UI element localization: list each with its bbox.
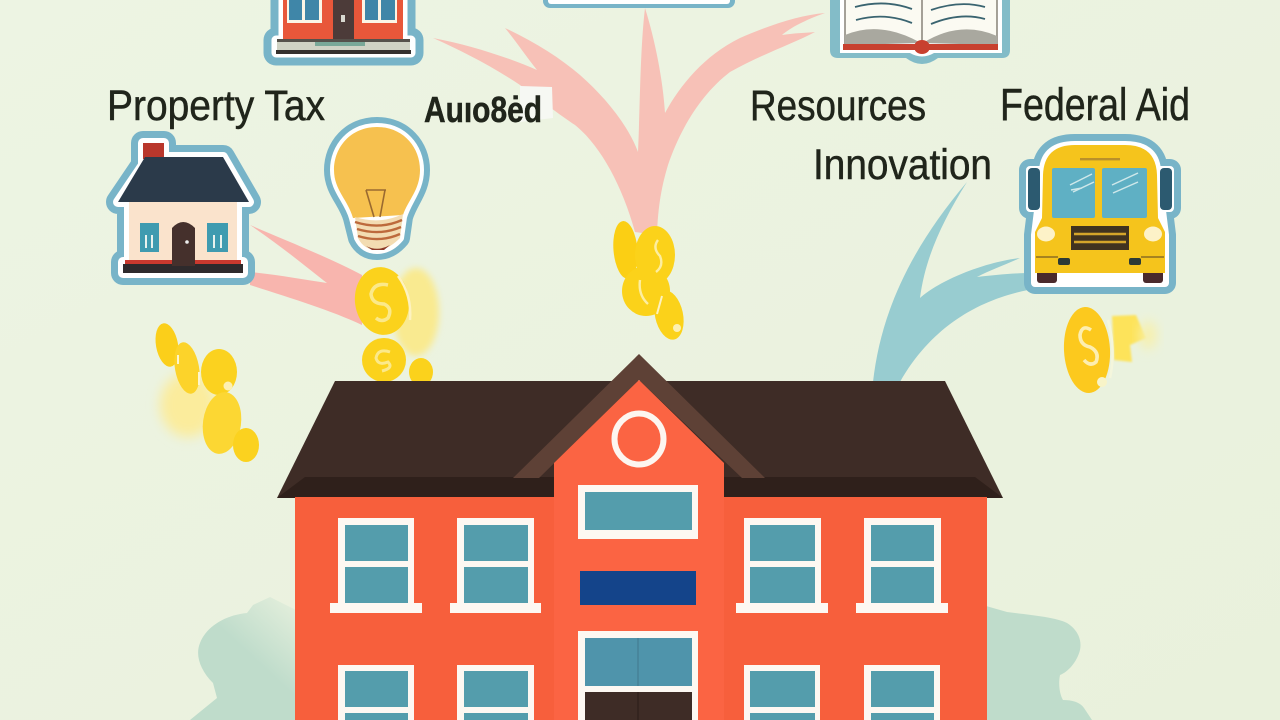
icon: open book [830, 0, 1010, 64]
coins: roof pile [351, 264, 439, 386]
label patch [520, 86, 553, 122]
school building [277, 354, 1003, 720]
arrow: converging pink flows [433, 8, 825, 235]
icon: light bulb [334, 127, 420, 250]
tower window [578, 485, 698, 539]
coins: far left pile [152, 321, 259, 462]
label: federal aid: Federal Aid [1000, 79, 1190, 130]
lower window 2 [457, 665, 534, 720]
roof [277, 381, 1003, 498]
walls [295, 497, 987, 720]
roof trim gable [513, 354, 765, 478]
icon: school bus [1028, 145, 1172, 283]
lower window 4 [864, 665, 940, 720]
icon: top centre panel [543, 0, 735, 8]
arrow: property tax flow [250, 225, 362, 325]
upper window 4 [856, 518, 948, 613]
arrow: federal aid flow [873, 182, 1040, 382]
bush left [190, 597, 296, 720]
blue sign [580, 571, 696, 605]
upper window 2 [450, 518, 541, 613]
entrance [578, 631, 698, 720]
label: garbled heading: Auıo8ėd [424, 89, 542, 130]
lower window 3 [744, 665, 820, 720]
icon: left house [118, 143, 249, 273]
label: resources: Resources [750, 82, 926, 130]
upper window 3 [736, 518, 828, 613]
round window [614, 414, 664, 464]
label: innovation: Innovation [813, 141, 992, 189]
icon: top house [276, 0, 411, 54]
lower window 1 [338, 665, 414, 720]
coins: right pile [1062, 306, 1156, 394]
bush right [986, 606, 1092, 720]
coins: centre pile [611, 220, 688, 342]
upper window 1 [330, 518, 422, 613]
centre tower [554, 380, 724, 720]
label: property tax: Property Tax [107, 82, 325, 130]
